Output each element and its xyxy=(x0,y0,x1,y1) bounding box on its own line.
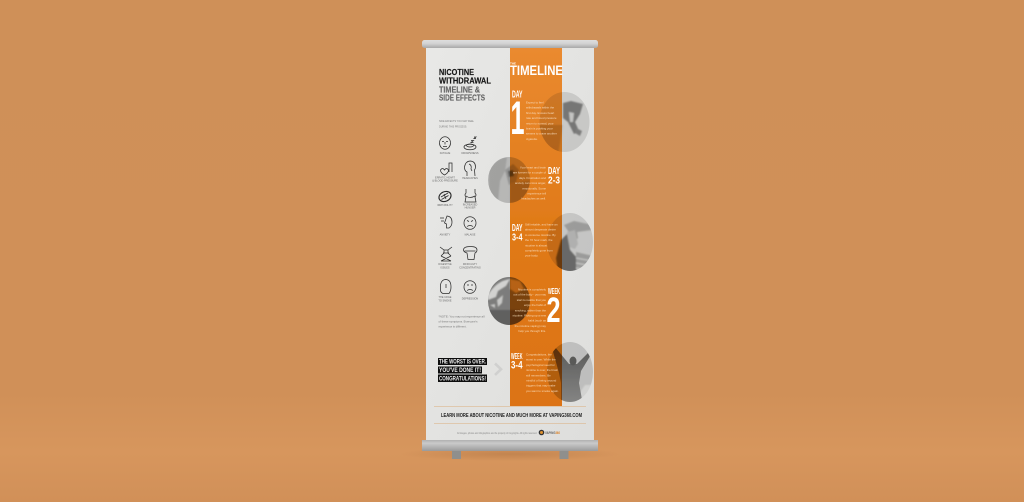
entry: day 2-3: DAY xyxy=(548,166,560,177)
banner stand xyxy=(422,40,598,459)
entry: week 2: the nicotine vaping) may xyxy=(515,324,547,328)
photo circle: day 1 xyxy=(540,92,590,152)
entry: day 1 xyxy=(510,88,557,144)
icon: malaise: MALAISE xyxy=(465,234,476,236)
entry: day 1: 1 xyxy=(510,91,524,144)
entry: week 2: help you through this. xyxy=(518,329,546,333)
icon: depression: DEPRESSION xyxy=(462,298,478,300)
note: *NOTE: You may not experience all xyxy=(438,314,485,318)
icon: difficulty concentrating: DIFFICULTY xyxy=(463,263,477,266)
icon: the urge to smoke: THE URGE xyxy=(439,296,452,299)
icon: digestive issues: ISSUES xyxy=(440,266,450,270)
title xyxy=(439,67,491,103)
entry: week 3-4: psychological need for xyxy=(526,363,555,367)
title: WITHDRAWAL xyxy=(439,76,491,86)
icon: headaches xyxy=(462,161,478,180)
entry: week 2: habit (such as xyxy=(528,319,547,323)
icon: increased hunger: HUNGER xyxy=(465,206,476,210)
entry: day 1: rate and blood pressure xyxy=(526,116,557,120)
floor shadow xyxy=(400,447,620,461)
timeline heading: TIMELINE xyxy=(510,62,563,78)
icon: anxiety: ANXIETY xyxy=(440,234,451,236)
orange timeline column xyxy=(510,46,562,406)
icon: fatigue xyxy=(440,137,451,155)
icon: difficulty concentrating xyxy=(459,246,481,270)
banner stand: WEEK xyxy=(548,286,560,296)
foot left xyxy=(452,451,461,459)
logo xyxy=(539,430,560,435)
entry: day 1: withdrawals within the xyxy=(526,106,555,110)
entry: day 3-4: your body. xyxy=(525,254,538,258)
entry: day 1: Expect to feel xyxy=(526,100,544,104)
entry: day 2-3: are forever for a couple of xyxy=(513,171,546,175)
note: experience is different. xyxy=(438,324,467,328)
entry: day 3-4: almost desperate desire xyxy=(525,228,556,232)
icon: drowsiness xyxy=(461,137,479,155)
callout xyxy=(438,358,487,382)
entry: week 2 xyxy=(513,286,560,333)
logo: VAPING360 xyxy=(545,431,560,435)
entry: week 2: Nicotine is completely xyxy=(518,288,547,292)
icon: heart rate: & BLOOD PRESSURE xyxy=(432,180,458,182)
entry: week 3-4: worst is over. While the xyxy=(526,358,556,362)
photo circle: week 2 xyxy=(488,277,530,325)
entry: week 2: 2 xyxy=(546,291,560,330)
entry: week 3-4 xyxy=(511,351,559,393)
entry: day 3-4 xyxy=(512,222,558,258)
entry: day 3-4: Still irritable, and have an xyxy=(525,222,558,226)
foot right xyxy=(560,451,568,459)
photo circle: day 3-4 xyxy=(547,213,593,271)
icon: increased hunger: INCREASED xyxy=(463,204,477,206)
arrow xyxy=(495,364,501,375)
entry: day 2-3: emotionally. Some xyxy=(522,186,546,190)
icon: drowsiness: DROWSINESS xyxy=(461,152,479,155)
icon: irritability xyxy=(437,189,453,207)
entry: day 2-3: anxiety can cross anger, xyxy=(515,181,546,185)
callout: THE WORST IS OVER. xyxy=(439,359,486,366)
entry: day 2-3: Your heart and brain xyxy=(520,166,546,170)
entry: day 2-3: experience tell xyxy=(527,192,546,196)
entry: week 2: nicotine. Picking up a new xyxy=(513,314,547,318)
entry: week 3-4: 3-4 xyxy=(511,360,523,372)
entry: day 1: return to normal, your xyxy=(526,121,554,125)
entry: day 3-4: completely gone from xyxy=(525,248,553,252)
footer panel xyxy=(434,406,586,435)
icon: difficulty concentrating: CONCENTRATING xyxy=(459,266,481,270)
entry: day 3-4: the 72 hour mark, the xyxy=(525,238,553,242)
icon: the urge to smoke: TO SMOKE xyxy=(438,300,452,302)
entry: week 3-4: Congratulations, the xyxy=(526,352,552,356)
entry: week 2: enjoy the habit of xyxy=(524,303,546,307)
icon: digestive issues xyxy=(438,247,452,270)
entry: week 2: out of the body - you may xyxy=(513,293,547,297)
entry: week 3-4: WEEK xyxy=(511,351,523,361)
entry: week 3-4: still remembers. Be xyxy=(526,373,551,377)
entry: day 2-3: days. Frustration and xyxy=(519,176,546,180)
icon: increased hunger xyxy=(463,189,477,210)
note: of these symptoms. Everyone's xyxy=(438,320,478,324)
icon: headaches: HEADACHES xyxy=(462,177,478,180)
icon: heart rate xyxy=(432,163,458,182)
copyright: All images, photos and infographics are the property of Copyrights. All rights reserved. xyxy=(457,431,537,435)
icon: irritability: IRRITABILITY xyxy=(437,204,453,207)
entry: week 3-4: triggers that may make xyxy=(526,384,556,388)
title: NICOTINE xyxy=(439,67,474,77)
entry: day 3-4: nicotine is almost xyxy=(525,243,547,247)
icon: malaise xyxy=(464,217,476,236)
entry: day 2-3 xyxy=(513,166,560,201)
entry: day 1: senses to crave another xyxy=(526,132,557,136)
entry: week 3-4: you want to smoke again. xyxy=(526,389,559,393)
footer call to action: LEARN MORE ABOUT NICOTINE AND MUCH MORE AT VAPING360.COM xyxy=(441,413,582,419)
icon: fatigue: FATIGUE xyxy=(440,152,451,155)
entry: day 1: DAY xyxy=(512,88,522,100)
entry: day 3-4: 3-4 xyxy=(512,232,523,244)
title: SIDE EFFECTS xyxy=(439,93,485,103)
top rail xyxy=(422,40,598,48)
photo circle: week 3-4 xyxy=(547,342,593,402)
entry: day 1: cigarette. xyxy=(526,137,538,141)
photo circle: day 2-3 xyxy=(488,157,530,203)
icon: anxiety xyxy=(440,216,452,236)
entry: week 3-4: nicotine is over, the brain xyxy=(526,368,558,372)
title: TIMELINE & xyxy=(439,84,480,94)
entry: week 3-4: mindful of being around xyxy=(526,378,557,382)
entry: day 2-3: headaches as well. xyxy=(521,197,546,201)
icon: heart rate: ERRATIC HEART xyxy=(435,176,455,180)
banner paper xyxy=(426,46,594,441)
entry: day 2-3: 2-3 xyxy=(548,176,560,186)
entry: day 3-4: to consume nicotine. By xyxy=(525,233,556,237)
callout: CONGRATULATIONS! xyxy=(439,375,486,382)
entry: day 1: first day. Excess heart xyxy=(526,111,554,115)
entry: week 2: start to realize that you xyxy=(517,298,546,302)
bottom rail xyxy=(422,440,598,451)
intro text: DURING THIS PROCESS: xyxy=(439,124,467,128)
icon: depression xyxy=(462,281,478,300)
timeline heading: THE xyxy=(510,62,516,66)
entry: day 1: brain is pushing your xyxy=(526,126,553,130)
note xyxy=(438,314,485,328)
entry: day 3-4: DAY xyxy=(512,222,522,234)
entry: week 2: smoking, rather than the xyxy=(515,308,546,312)
left panel xyxy=(432,67,501,382)
icon: the urge to smoke xyxy=(438,280,452,302)
callout: YOU'VE DONE IT! xyxy=(439,367,481,374)
icon: digestive issues: DIGESTIVE xyxy=(438,263,452,266)
intro text: SIDE EFFECTS YOU MAY FEEL xyxy=(439,119,475,123)
intro text xyxy=(439,119,475,128)
